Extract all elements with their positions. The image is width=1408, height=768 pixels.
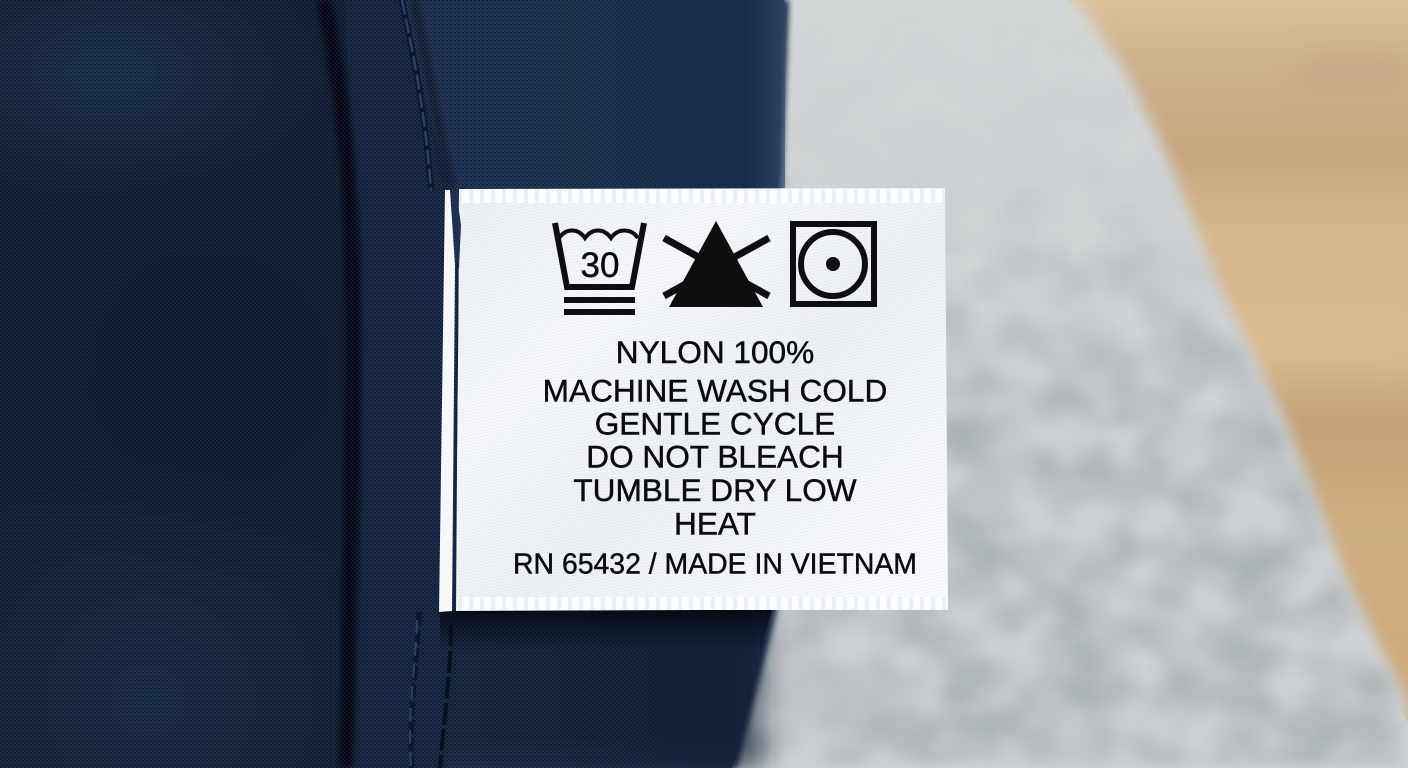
seam stitching lower xyxy=(410,612,451,768)
woven selvedge bottom xyxy=(457,597,948,610)
icon: wash at 30 degrees xyxy=(555,223,644,315)
jacket body, right panel xyxy=(0,0,789,768)
origin text: RN 65432 / MADE IN VIETNAM xyxy=(513,548,917,580)
composition text: NYLON 100% xyxy=(616,334,814,370)
seam stitching upper xyxy=(402,0,431,190)
icon: wash at 30 degrees: 30 xyxy=(581,246,619,285)
left folded edge and stitching xyxy=(439,190,461,612)
care instructions: MACHINE WASH COLD xyxy=(543,372,887,408)
icon: do not bleach xyxy=(664,221,769,307)
label fabric xyxy=(456,188,948,611)
icon: tumble dry low xyxy=(793,224,874,304)
care instructions xyxy=(543,372,887,541)
seam fold xyxy=(324,0,452,768)
care instructions: GENTLE CYCLE xyxy=(595,406,835,442)
grey sweater background xyxy=(700,0,1408,768)
care instructions: TUMBLE DRY LOW xyxy=(573,472,857,508)
woven care label xyxy=(439,188,948,612)
label shadow xyxy=(440,610,772,650)
navy jacket xyxy=(0,0,790,768)
jacket shading xyxy=(345,600,760,768)
care instructions: HEAT xyxy=(674,505,756,541)
woven selvedge top xyxy=(461,189,945,203)
care instructions: DO NOT BLEACH xyxy=(586,439,844,475)
woven fabric texture xyxy=(0,0,790,768)
